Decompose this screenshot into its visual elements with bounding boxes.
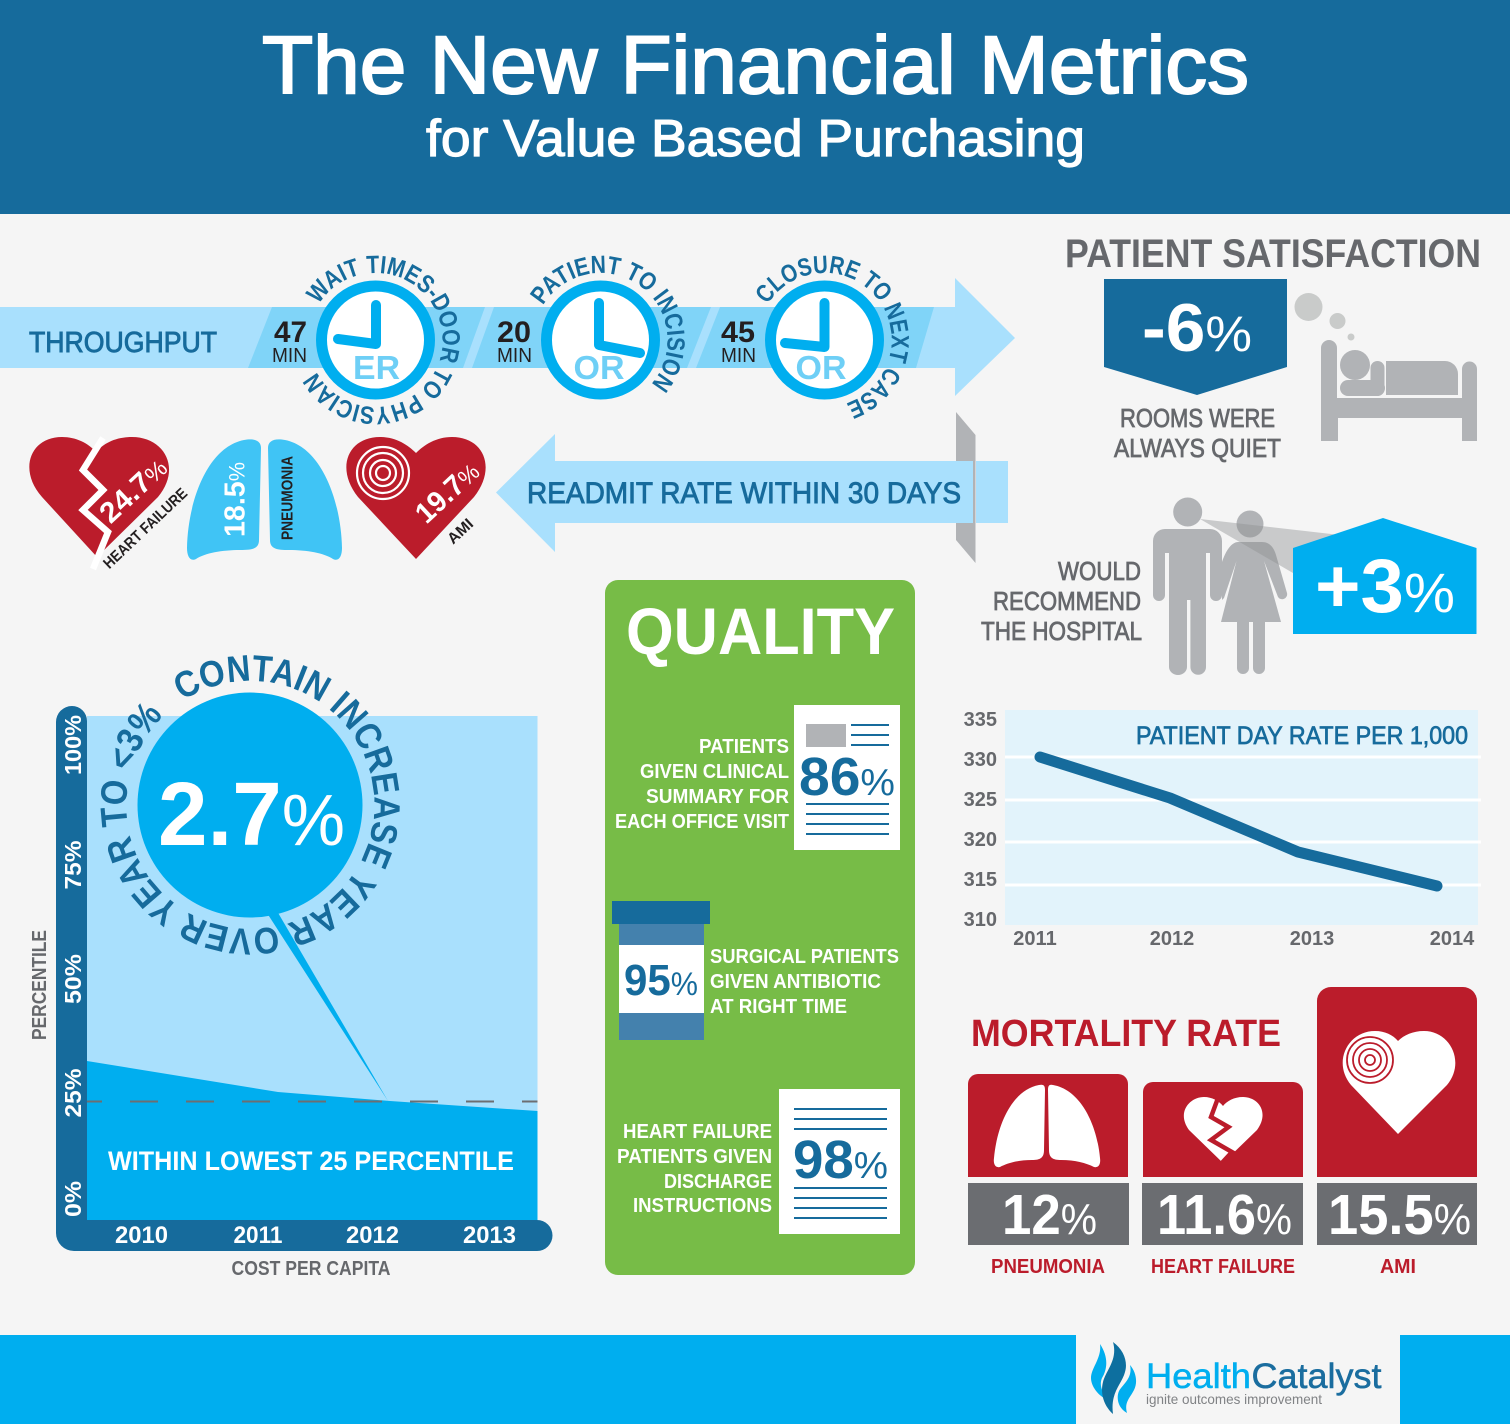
beam bbox=[1200, 519, 1340, 573]
clinical summary text: EACH OFFICE VISIT bbox=[615, 811, 789, 833]
rooms text: ROOMS WERE bbox=[1120, 403, 1275, 433]
clock: ER wait time: WAIT TIMES-DOOR TO PHYSICIAN bbox=[302, 256, 460, 424]
clinical summary text: GIVEN CLINICAL bbox=[640, 761, 789, 783]
callout: 2.7% bbox=[100, 655, 400, 1100]
y axis labels bbox=[60, 715, 86, 1217]
chart: cost per capita area bbox=[29, 706, 552, 1280]
heading: MORTALITY RATE bbox=[971, 1013, 1281, 1055]
area label: WITHIN LOWEST 25 PERCENTILE bbox=[108, 1146, 514, 1176]
rooms text: ALWAYS QUIET bbox=[1114, 433, 1281, 463]
pill bottle: 95% bbox=[612, 901, 710, 1040]
clock: closure to next case: CLOSURE TO NEXT CASE bbox=[756, 256, 909, 419]
axis labels: 325 bbox=[964, 789, 997, 811]
axis labels: 335 bbox=[964, 709, 997, 731]
card: AMI bbox=[1317, 987, 1477, 1278]
clinical summary text: SUMMARY FOR bbox=[646, 786, 790, 808]
footer bbox=[0, 1335, 1510, 1424]
throughput arrow bbox=[0, 278, 1015, 396]
header banner bbox=[0, 0, 1510, 214]
clock: closure to next case: MIN bbox=[721, 345, 756, 367]
logo wordmark: Catalyst bbox=[1252, 1357, 1382, 1396]
antibiotic text: AT RIGHT TIME bbox=[710, 996, 847, 1018]
chart: patient day rate: 2012 bbox=[1150, 928, 1194, 950]
chart: patient day rate: 2014 bbox=[1430, 928, 1475, 950]
logo tagline: ignite outcomes improvement bbox=[1146, 1391, 1322, 1407]
pill bottle: 95%: 95% bbox=[624, 956, 698, 1005]
card: AMI: AMI bbox=[1380, 1256, 1416, 1278]
chart: patient day rate bbox=[964, 709, 1481, 950]
y axis labels: 0% bbox=[60, 1181, 86, 1217]
recommend text: WOULD bbox=[1058, 556, 1141, 586]
y axis labels: 75% bbox=[60, 840, 86, 890]
badge: -6%: -6% bbox=[1142, 290, 1252, 366]
chart: patient day rate: 2013 bbox=[1290, 928, 1334, 950]
icon: couple bbox=[1153, 498, 1287, 675]
icon: lungs readmit 18.5% bbox=[187, 439, 342, 560]
callout: 2.7%: 2.7% bbox=[158, 765, 345, 865]
card: heart failure: HEART FAILURE bbox=[1151, 1256, 1295, 1278]
icon: broken heart readmit 24.7% bbox=[29, 437, 191, 572]
icon: lungs readmit 18.5%: PNEUMONIA bbox=[280, 456, 296, 540]
panel: mortality rate bbox=[968, 987, 1477, 1278]
panel: patient satisfaction bbox=[981, 232, 1481, 675]
chart: patient day rate: 2011 bbox=[1013, 928, 1057, 950]
axis labels: 315 bbox=[964, 869, 997, 891]
axis labels: 330 bbox=[964, 749, 997, 771]
clock: patient to incision: OR bbox=[574, 349, 625, 386]
icon: broken heart readmit 24.7%: HEART FAILURE bbox=[100, 485, 191, 572]
y axis labels: 100% bbox=[60, 715, 86, 775]
axis labels: 320 bbox=[964, 829, 997, 851]
discharge text: INSTRUCTIONS bbox=[633, 1195, 772, 1217]
badge: +3%: +3% bbox=[1315, 544, 1455, 629]
icon: broken heart readmit 24.7%: 24.7% bbox=[94, 452, 174, 530]
y axis title: PERCENTILE bbox=[29, 930, 51, 1040]
x axis labels bbox=[115, 1222, 516, 1249]
clinical summary text: PATIENTS bbox=[699, 736, 789, 758]
clock: closure to next case: OR bbox=[796, 349, 847, 386]
y axis labels: 25% bbox=[60, 1068, 86, 1118]
readmit arrow bbox=[496, 412, 1008, 563]
discharge text: PATIENTS GIVEN bbox=[617, 1146, 772, 1168]
discharge text: DISCHARGE bbox=[664, 1171, 772, 1193]
card: heart failure bbox=[1142, 1082, 1303, 1278]
antibiotic text: GIVEN ANTIBIOTIC bbox=[710, 971, 881, 993]
icon: target heart readmit 19.7%: 19.7% bbox=[409, 455, 486, 530]
axis labels bbox=[964, 709, 997, 931]
clock: ER wait time: 47 bbox=[274, 316, 307, 349]
logo icon: flames bbox=[1091, 1342, 1136, 1414]
icon: target heart readmit 19.7%: AMI bbox=[444, 516, 477, 548]
x axis labels: 2011 bbox=[234, 1222, 282, 1249]
clock: ER wait time: ER bbox=[353, 349, 400, 386]
recommend text: RECOMMEND bbox=[993, 586, 1141, 616]
throughput label: THROUGHPUT bbox=[29, 327, 217, 359]
card: pneumonia bbox=[968, 1074, 1129, 1278]
x axis labels: 2013 bbox=[463, 1222, 516, 1249]
badge: -6% bbox=[1104, 279, 1287, 395]
discharge text: HEART FAILURE bbox=[623, 1121, 772, 1143]
recommend text: THE HOSPITAL bbox=[981, 616, 1142, 646]
axis labels: 310 bbox=[964, 909, 997, 931]
antibiotic text: SURGICAL PATIENTS bbox=[710, 946, 899, 968]
readmit label: READMIT RATE WITHIN 30 DAYS bbox=[527, 477, 961, 510]
card: pneumonia: 12% bbox=[1002, 1183, 1097, 1247]
x axis title: COST PER CAPITA bbox=[232, 1258, 390, 1280]
clock: patient to incision: 20 bbox=[497, 316, 531, 349]
x axis labels: 2010 bbox=[115, 1222, 168, 1249]
rate line bbox=[1040, 757, 1437, 886]
document: 98% bbox=[779, 1089, 900, 1234]
icon: sleeping patient bbox=[1294, 293, 1477, 441]
icon: target heart readmit 19.7% bbox=[346, 437, 486, 559]
heading: QUALITY bbox=[626, 594, 895, 668]
logo wordmark: Health bbox=[1146, 1357, 1251, 1396]
chart axes bbox=[56, 706, 552, 1251]
chart title: PATIENT DAY RATE PER 1,000 bbox=[1136, 722, 1468, 750]
card: heart failure: 11.6% bbox=[1157, 1183, 1292, 1247]
document: 86% bbox=[794, 705, 900, 850]
clock: ER wait time: MIN bbox=[272, 345, 307, 367]
card: AMI: 15.5% bbox=[1328, 1183, 1471, 1247]
clock: patient to incision: PATIENT TO INCISION bbox=[530, 256, 685, 393]
card: pneumonia: PNEUMONIA bbox=[991, 1256, 1105, 1278]
curved caption: CONTAIN INCREASE YEAR OVER YEAR TO <3% bbox=[100, 655, 400, 955]
x axis labels: 2012 bbox=[346, 1222, 399, 1249]
icon: lungs readmit 18.5%: 18.5% bbox=[220, 462, 252, 537]
badge: +3% bbox=[1293, 518, 1476, 634]
clock: closure to next case: 45 bbox=[721, 316, 755, 349]
clock: patient to incision: MIN bbox=[497, 345, 532, 367]
document: 86%: 86% bbox=[799, 747, 895, 807]
title: The New Financial Metrics bbox=[262, 20, 1249, 111]
y axis labels: 50% bbox=[60, 954, 86, 1004]
subtitle: for Value Based Purchasing bbox=[426, 110, 1085, 168]
panel: quality bbox=[605, 580, 915, 1275]
document: 98%: 98% bbox=[793, 1130, 888, 1190]
